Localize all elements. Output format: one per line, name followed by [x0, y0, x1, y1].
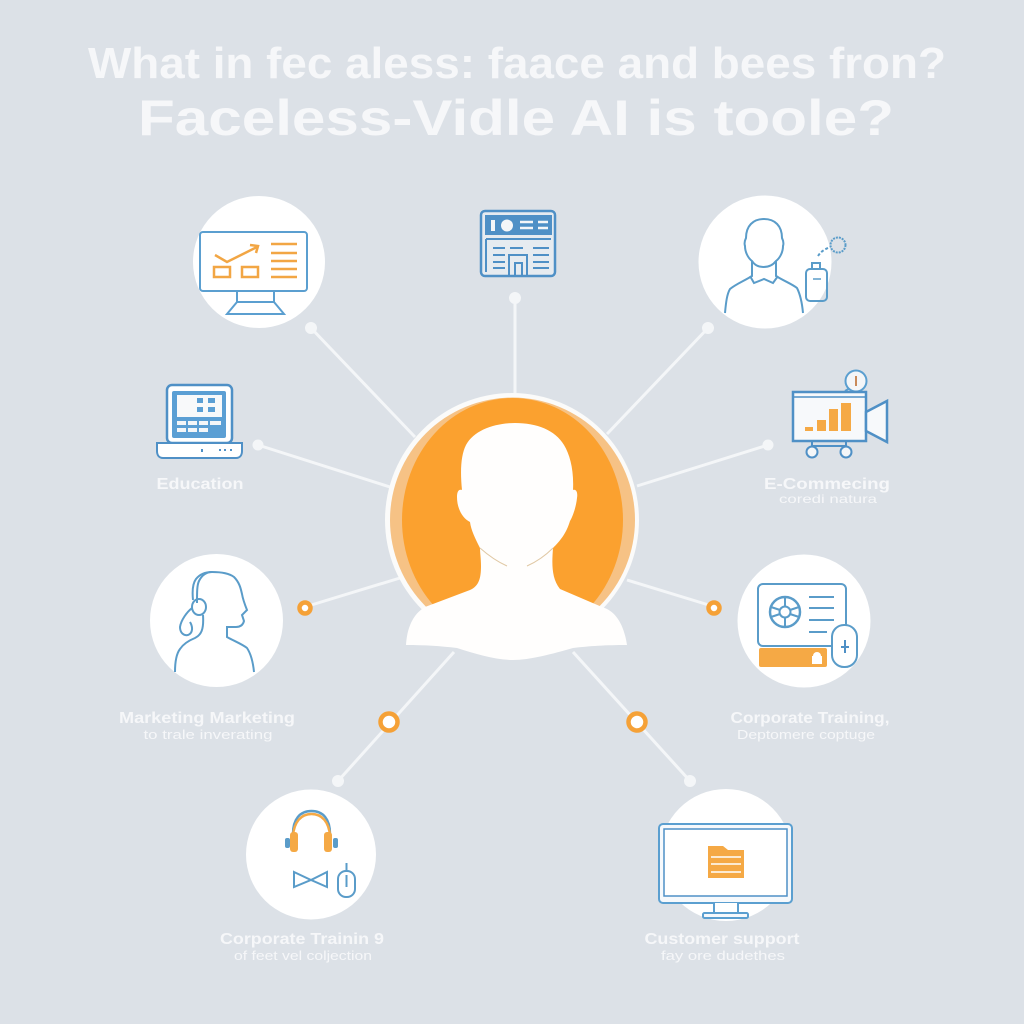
label: customer support: Customer support: [644, 931, 800, 948]
label: customer support: [644, 931, 800, 963]
connector lines: [254, 294, 772, 786]
label: marketing: Marketing Marketing: [119, 710, 295, 727]
icon: web page layout: [481, 211, 555, 276]
label: e-commerce: E-Commecing: [764, 476, 890, 493]
title: [88, 39, 946, 146]
icon: laptop: [157, 385, 242, 458]
title: What in fec aless: faace and bees fron?: [88, 39, 946, 88]
panel: customer support: [644, 789, 800, 963]
orange connector nodes: [300, 602, 720, 730]
label: marketing: [119, 710, 295, 742]
panel: top left monitor chart: [193, 196, 325, 328]
label: marketing: to trale inverating: [144, 728, 273, 742]
label: corporate training: [730, 710, 890, 742]
label: corporate training left: of feet vel coljection: [234, 949, 372, 963]
icon: video camera: [793, 370, 887, 458]
label: e-commerce: [764, 476, 890, 506]
label: e-commerce: coredi natura: [779, 492, 877, 506]
panel: corporate training left: [220, 790, 384, 963]
label: corporate training: Corporate Training,: [730, 710, 890, 727]
label: corporate training: Deptomere coptuge: [737, 728, 875, 742]
icon: card with mouse: [738, 554, 870, 688]
label: corporate training left: Corporate Trainin 9: [220, 931, 384, 948]
panel: corporate training right: [730, 554, 890, 742]
panel: education: [156, 385, 244, 493]
label: customer support: fay ore dudethes: [661, 949, 785, 963]
panel: marketing: [119, 554, 295, 742]
label: corporate training left: [220, 931, 384, 963]
icon: desktop monitor: [659, 789, 792, 921]
panel: top right person with device: [698, 196, 846, 328]
panel: e-commerce camera: [764, 370, 890, 506]
label: education: Education: [156, 476, 244, 493]
central faceless figure: [385, 393, 639, 660]
title: Faceless-Vidle AI is toole?: [138, 90, 894, 146]
icon: profile with headset: [150, 554, 283, 687]
icon: headphones and bow: [246, 790, 376, 920]
